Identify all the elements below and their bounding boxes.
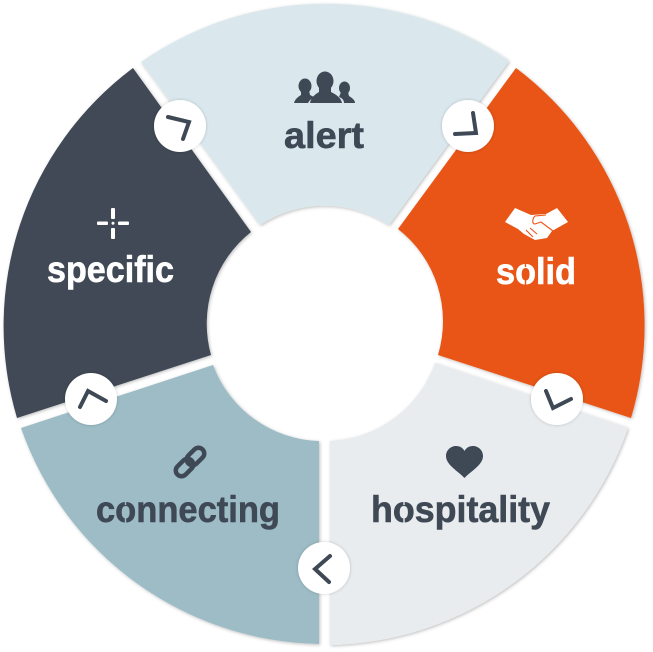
arrow [80, 391, 106, 407]
knob: specific to alert [154, 100, 206, 152]
label: alert: alert [284, 115, 364, 156]
panel: solid [398, 68, 645, 418]
knob: solid to hospitality [531, 373, 583, 425]
stencil cuts: connecting [124, 498, 126, 524]
icon: people [294, 72, 355, 103]
arrow [455, 113, 476, 134]
arrow [168, 117, 189, 139]
label: specific: specific [47, 249, 174, 290]
panel: specific [4, 68, 251, 418]
knob: connecting to specific [65, 373, 117, 425]
label: solid: solid [496, 251, 576, 292]
arrow [315, 556, 330, 582]
icon: handshake [505, 208, 568, 240]
panel: alert [141, 4, 509, 225]
icon: link [173, 445, 207, 479]
knob: hospitality to connecting [298, 542, 350, 594]
panel: hospitality [330, 363, 628, 645]
label: hospitality: hospitality [371, 489, 550, 530]
knob: alert to solid [442, 100, 494, 152]
stencil cuts: hospitality [403, 498, 405, 524]
arrow [546, 391, 571, 408]
panel: connecting [21, 365, 319, 644]
stencil cuts: solid [524, 260, 526, 286]
label: connecting: connecting [96, 489, 280, 530]
icon: heart [446, 446, 483, 478]
icon: crosshair [97, 208, 129, 239]
